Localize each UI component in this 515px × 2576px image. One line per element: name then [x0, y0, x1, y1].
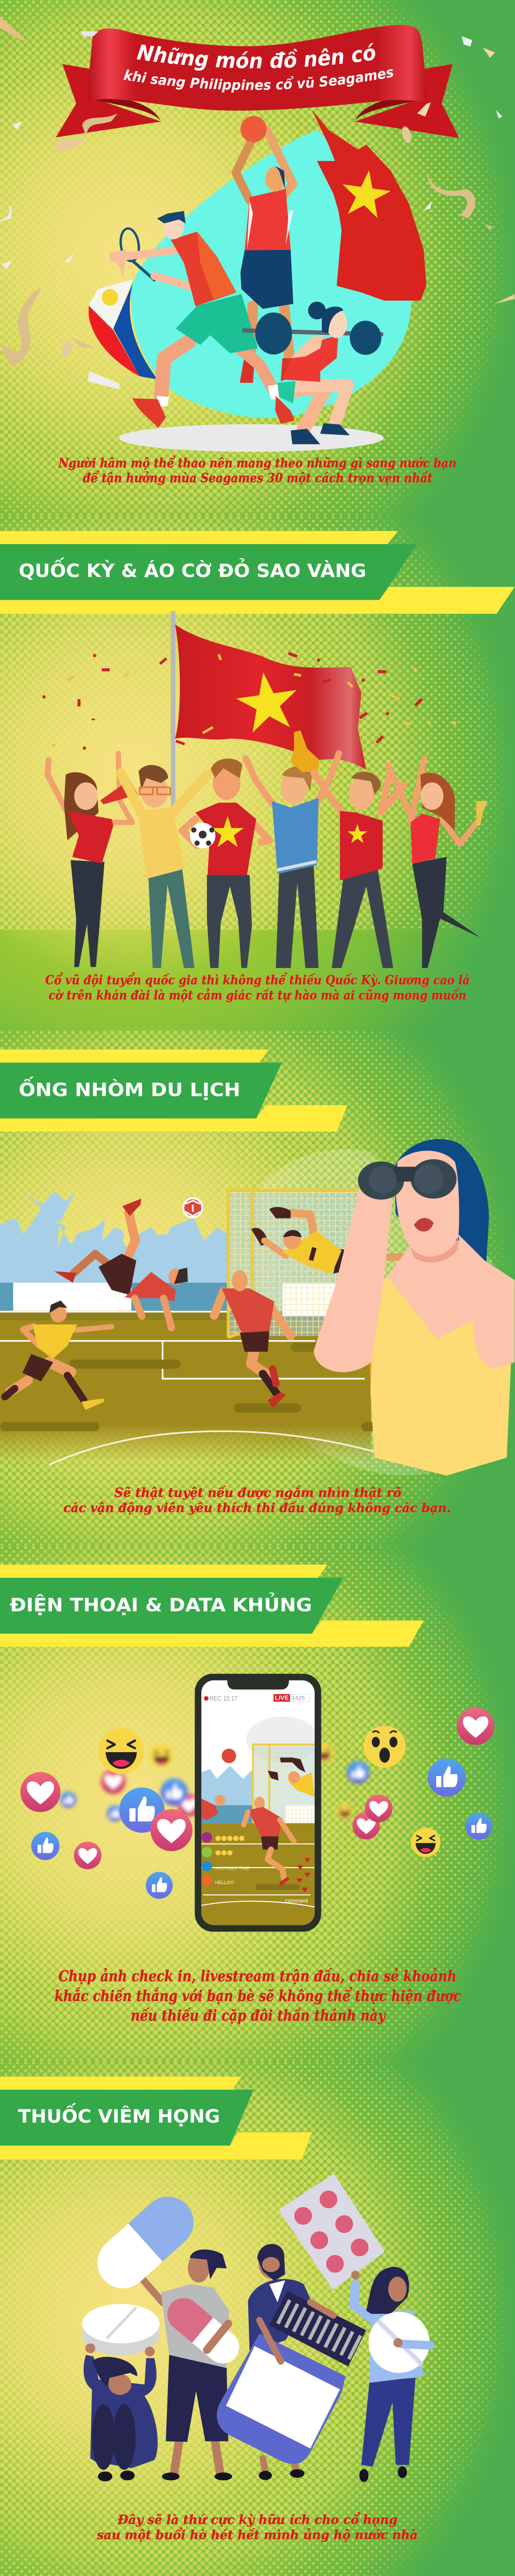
title ribbon [56, 25, 459, 138]
icon: big capsule [87, 2186, 204, 2299]
icons: hearts [21, 1707, 494, 1869]
icon: Philippines flag brush [89, 279, 158, 380]
pale blob behind woman [260, 1149, 493, 1476]
icon: Vietnam flag brush [312, 110, 426, 301]
panel: intro [0, 0, 515, 515]
heading text: ĐIỆN THOẠI & DATA KHỦNG [10, 1592, 312, 1616]
figure: woman with binoculars [314, 1139, 514, 1476]
intro caption: để tận hưởng mùa Seagames 30 một cách trọn vẹn nhất [83, 470, 433, 485]
background: intro [0, 0, 515, 515]
background: medicine section [0, 2061, 515, 2576]
medicine caption: Đây sẽ là thứ cực kỳ hữu ích cho cổ họng [117, 2512, 398, 2527]
heading text: ỐNG NHÒM DU LỊCH [19, 1077, 241, 1101]
figure: fan with megaphone [47, 753, 138, 967]
phone caption [55, 1968, 461, 2024]
icons: emoji faces [98, 1725, 440, 1857]
heading text: QUỐC KỲ & ÁO CỜ ĐỎ SAO VÀNG [19, 557, 366, 582]
figure: woman with round tablet [351, 2267, 430, 2482]
confetti: gold and silver [0, 16, 514, 389]
teal blob [131, 130, 412, 418]
background: binoculars section [0, 1030, 515, 1546]
livestream comments: ANOTHER TIME [215, 1866, 250, 1871]
livestream comments: HELLO!!! [215, 1880, 234, 1885]
stadium scene [0, 1191, 407, 1465]
flag section caption: Cổ vũ đội tuyển quốc gia thì không thể thiếu Quốc Kỳ. Giương cao lá [45, 973, 470, 988]
flag pole [171, 611, 176, 808]
icon: pink capsule [161, 2291, 246, 2370]
background: phone section [0, 1546, 515, 2061]
figure: fan in red star shirt [314, 772, 404, 968]
flag section caption: cờ trên khán đài là một cảm giác rất tự hào mà ai cũng mong muốn [48, 988, 467, 1003]
intro caption [58, 455, 456, 485]
blurred reaction icons [60, 1743, 369, 1822]
live badge [273, 1694, 310, 1702]
phone with livestream [195, 1674, 321, 1931]
figure: overhead kicker [54, 1199, 188, 1328]
figure: red player running [214, 1270, 290, 1408]
phone caption: Chụp ảnh check in, livestream trận đấu, chia sẻ khoảnh [59, 1968, 456, 1985]
figure: fan woman dancing [388, 758, 488, 968]
live badge: 1425 [291, 1696, 305, 1702]
heading band: medicine [0, 2077, 312, 2159]
panel: binoculars [0, 1030, 515, 1546]
title line 2: khi sang Philippines cổ vũ Seagames [124, 69, 393, 93]
figure: person with capsule [87, 2186, 246, 2480]
icons: likes [31, 1758, 492, 1899]
icon: blister pack [281, 2176, 383, 2287]
figure: fan in yellow sweater [121, 765, 208, 968]
figure: yellow player running [5, 1300, 112, 1410]
heading band: binoculars [0, 1049, 348, 1131]
figure: tennis player [108, 211, 295, 428]
flag section caption [45, 973, 470, 1003]
panel: phone and data [0, 1546, 515, 2061]
binoculars caption [63, 1485, 451, 1515]
figure: crouching person with tablet [82, 2304, 160, 2481]
heading text: THUỐC VIÊM HỌNG [18, 2103, 220, 2127]
figure: fan with ball [182, 758, 269, 968]
heading band: flag section [0, 531, 514, 614]
livestream comments: comment [285, 1898, 308, 1904]
confetti [42, 652, 456, 750]
phone caption: nếu thiếu đi cặp đôi thần thánh này [131, 2007, 386, 2024]
livestream comments [202, 1832, 310, 1904]
heading band: phone [0, 1565, 424, 1647]
recording status: REC 15:17 [210, 1694, 237, 1702]
figure: fan with foam finger [246, 731, 339, 968]
binoculars caption: các vận động viên yêu thích thi đấu đúng không các bạn. [63, 1500, 451, 1515]
medicine caption [96, 2512, 418, 2543]
intro caption: Người hâm mộ thể thao nên mang theo những gì sang nước bạn [58, 455, 456, 470]
panel: throat medicine [0, 2061, 515, 2576]
figure: weightlifter [242, 301, 383, 444]
icon: ball [182, 1197, 203, 1218]
figure: goalkeeper [251, 1207, 407, 1285]
figure: basketball player [236, 116, 294, 383]
medicine caption: sau một buổi hò hét hết mình ủng hộ nước nhà [96, 2528, 418, 2543]
ground ellipse [119, 424, 384, 452]
background: flag section [0, 515, 515, 1030]
figure: bearded person with bottle [217, 2244, 366, 2480]
phone caption: khắc chiến thắng với bạn bè sẽ không thể thực hiện được [55, 1987, 461, 2005]
live badge: LIVE [275, 1694, 289, 1702]
icon: medicine bottle [217, 2291, 366, 2464]
panel: flag and shirt [0, 515, 515, 1030]
icon: waving Vietnam flag [175, 624, 366, 770]
crowd silhouettes [0, 1191, 228, 1283]
goal net [228, 1191, 359, 1337]
binoculars caption: Sẽ thật tuyệt nếu được ngắm nhìn thật rõ [114, 1485, 401, 1500]
title line 1: Những món đồ nên có [136, 43, 375, 71]
